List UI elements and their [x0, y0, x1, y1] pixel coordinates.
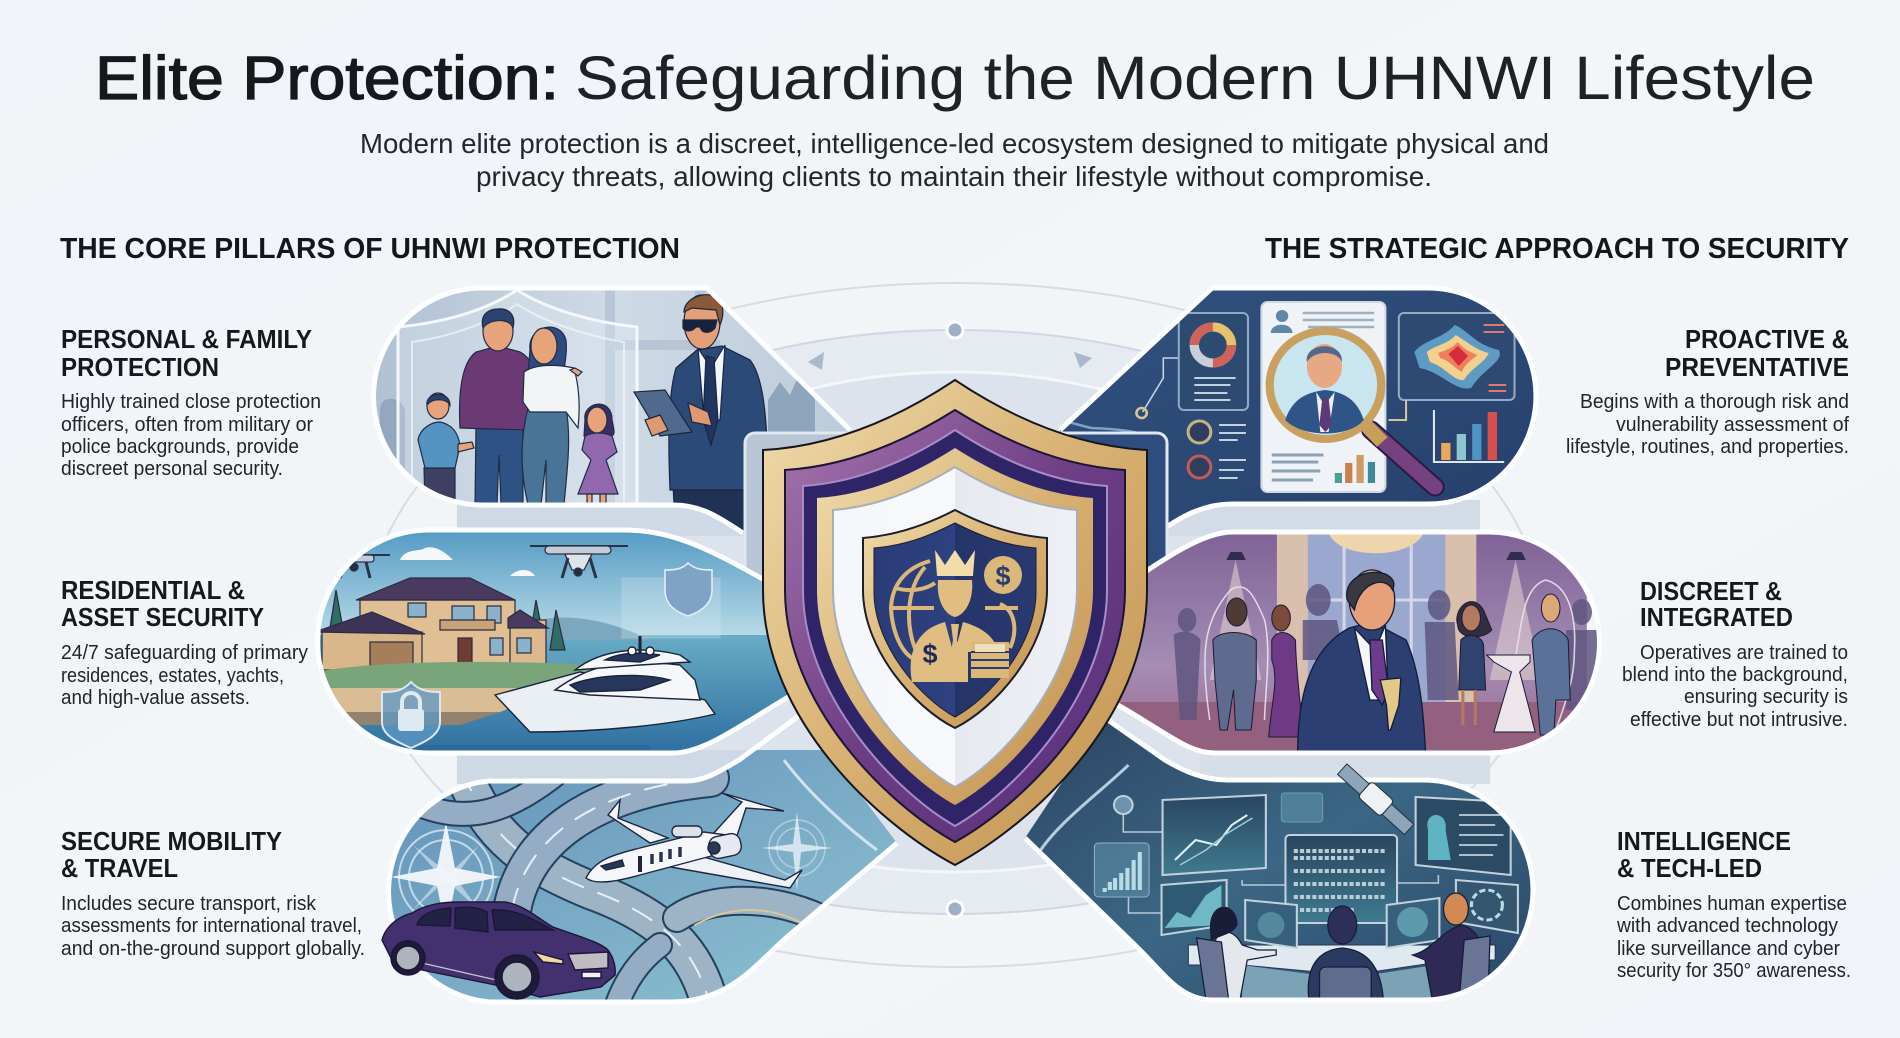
icon: private jet: [586, 793, 802, 888]
icon: mansion: [315, 578, 565, 670]
heading: strategic approach: THE STRATEGIC APPROACH TO SECURITY: [1265, 233, 1849, 265]
icon: luxury sedan: [382, 902, 615, 999]
title: Safeguarding the Modern UHNWI Lifestyle: [575, 44, 1815, 112]
title: [95, 44, 1815, 112]
icon: client figure with crown: [911, 550, 997, 682]
icon: small growth chart: [1094, 843, 1149, 897]
text block: personal and family protection: officers, often from military or: [61, 413, 313, 436]
icon: drone: [530, 546, 628, 578]
text block: personal and family protection: police backgrounds, provide: [61, 435, 299, 458]
text block: secure mobility and travel: & TRAVEL: [61, 853, 178, 883]
text block: proactive and preventative: lifestyle, routines, and properties.: [1566, 435, 1849, 458]
text block: discreet and integrated: DISCREET &: [1640, 576, 1782, 606]
text block: proactive and preventative: Begins with a thorough risk and: [1580, 390, 1849, 413]
icon: dossier card: [1261, 302, 1385, 492]
subtitle: [360, 128, 1549, 192]
text block: discreet and integrated: effective but not intrusive.: [1630, 708, 1848, 731]
text block: residential and asset security: ASSET SECURITY: [61, 602, 264, 632]
text block: personal and family protection: [61, 324, 321, 480]
text block: personal and family protection: discreet personal security.: [61, 457, 283, 480]
text block: discreet and integrated: Operatives are trained to: [1640, 641, 1848, 664]
panel: strategic analysis illustration: [1058, 286, 1538, 529]
icon: coin: [984, 556, 1022, 594]
panel: secure mobility illustration: [360, 715, 910, 1015]
text block: intelligence and tech-led: like surveillance and cyber: [1617, 937, 1840, 960]
icon: holographic shield and data panel: [622, 563, 720, 638]
icon: small drone: [340, 554, 390, 578]
text block: discreet and integrated: ensuring security is: [1684, 685, 1848, 708]
text block: residential and asset security: 24/7 safeguarding of primary: [61, 641, 309, 664]
heading: core pillars: THE CORE PILLARS OF UHNWI PROTECTION: [60, 233, 680, 265]
text block: discreet and integrated: [1622, 576, 1848, 731]
panel: personal and family protection illustration: [360, 280, 860, 540]
icon: satellite: [1336, 761, 1416, 837]
icon: globe: [891, 561, 1018, 658]
panel: intelligence and tech-led illustration: [1015, 710, 1542, 1010]
text block: intelligence and tech-led: & TECH-LED: [1617, 853, 1762, 883]
woman in white top: [522, 327, 582, 505]
central shield emblem: [763, 380, 1147, 865]
icon: padlock shield: [382, 682, 440, 748]
monitor wall: [1162, 795, 1518, 935]
security officer with tablet: [634, 295, 768, 540]
operators desk: [1188, 898, 1495, 1005]
compass roses: [392, 812, 832, 912]
text block: secure mobility and travel: assessments for international travel,: [61, 914, 362, 937]
panel: discreet and integrated illustration: [1116, 530, 1602, 756]
text block: secure mobility and travel: SECURE MOBILITY: [61, 826, 282, 856]
icon: cash stack: [971, 642, 1009, 678]
text block: discreet and integrated: INTEGRATED: [1640, 602, 1793, 632]
text block: personal and family protection: PROTECTION: [61, 352, 219, 382]
text block: personal and family protection: PERSONAL & FAMILY: [61, 324, 312, 354]
boy in blue shirt: [418, 393, 474, 505]
icon: yacht: [495, 636, 715, 732]
operators: [1197, 893, 1490, 1007]
guests with protective halos: [1205, 580, 1575, 730]
text block: residential and asset security: residences, estates, yachts,: [61, 664, 284, 687]
silhouettes of guests: [1174, 584, 1597, 720]
shield back plate: [745, 433, 1167, 583]
text block: residential and asset security: RESIDENTIAL &: [61, 575, 245, 605]
text block: secure mobility and travel: [61, 826, 365, 960]
text block: residential and asset security: and high-value assets.: [61, 686, 250, 709]
icon: donut chart card: [1179, 313, 1248, 410]
man in purple sweater: [460, 309, 533, 505]
winding roads: [420, 770, 820, 1015]
icon: bar chart: [1434, 410, 1504, 462]
text block: intelligence and tech-led: security for 350° awareness.: [1617, 959, 1851, 982]
main guest in navy suit: [1298, 570, 1426, 755]
background concentric rings: [367, 283, 1543, 967]
text block: proactive and preventative: PREVENTATIVE: [1665, 352, 1849, 382]
subtitle: Modern elite protection is a discreet, intelligence-led ecosystem designed to mitigate physical and: [360, 128, 1549, 159]
world map tile: [1281, 793, 1323, 822]
text block: proactive and preventative: vulnerability assessment of: [1616, 413, 1849, 436]
text block: residential and asset security: [61, 575, 309, 709]
title: Elite Protection:: [95, 44, 559, 112]
text block: intelligence and tech-led: with advanced technology: [1616, 914, 1839, 937]
subtitle: privacy threats, allowing clients to maintain their lifestyle without compromise.: [476, 161, 1432, 192]
text block: personal and family protection: Highly trained close protection: [61, 390, 321, 413]
text block: proactive and preventative: [1566, 324, 1849, 458]
text block: intelligence and tech-led: Combines human expertise: [1617, 892, 1847, 915]
text block: proactive and preventative: PROACTIVE &: [1685, 324, 1849, 354]
text block: discreet and integrated: blend into the background,: [1622, 663, 1848, 686]
text block: intelligence and tech-led: INTELLIGENCE: [1617, 826, 1791, 856]
text block: secure mobility and travel: and on-the-ground support globally.: [61, 937, 365, 960]
text block: secure mobility and travel: Includes secure transport, risk: [61, 892, 317, 915]
icon: coin: $: [995, 561, 1011, 591]
text block: intelligence and tech-led: [1616, 826, 1851, 982]
icon: client figure with crown: $: [922, 639, 938, 669]
girl in lilac dress: [578, 404, 618, 505]
panel: residential and asset security illustration: [310, 525, 800, 760]
crest: [863, 510, 1047, 728]
icon: threat heatmap card: [1399, 313, 1515, 400]
icon: magnifying glass: [1270, 331, 1435, 487]
